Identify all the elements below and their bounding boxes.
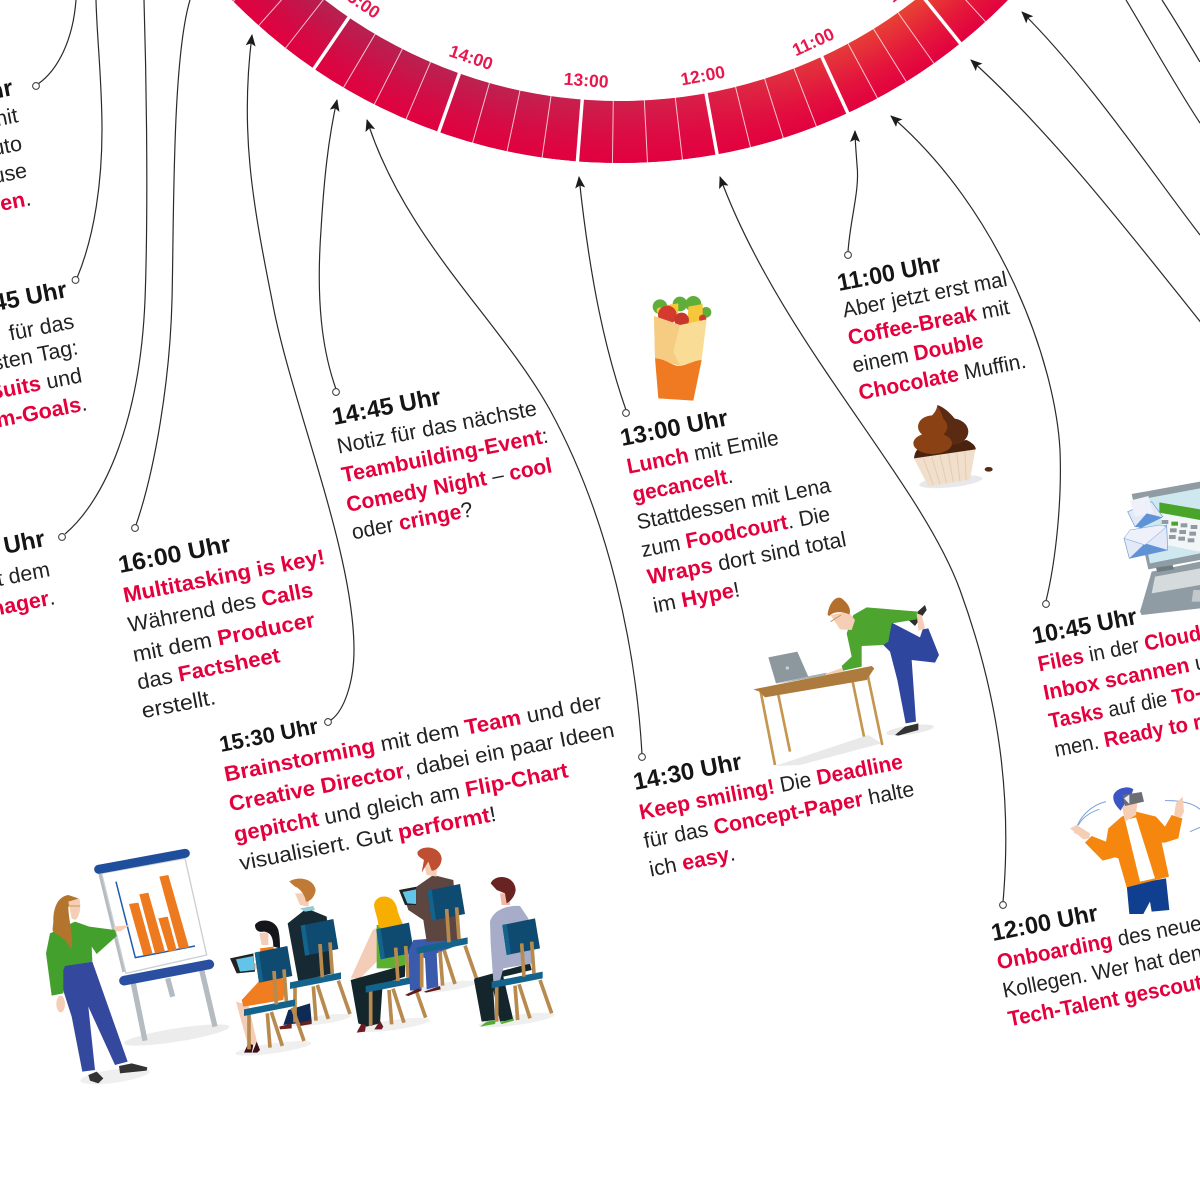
text block: cut-off left entry 1	[0, 74, 33, 226]
body text	[995, 911, 1200, 1031]
text block: cut-off left entry 2: für das	[7, 309, 76, 345]
body text: mit dem Producer	[131, 608, 317, 667]
person with tablet and beard	[399, 847, 477, 996]
body text: Comedy Night – cool	[344, 453, 554, 517]
body text	[623, 417, 854, 618]
body text: Lunch mit Emile	[625, 426, 781, 479]
illustration: laptop with calendar and mail	[1124, 482, 1200, 615]
body text: Creative Director, dabei ein paar Ideen	[227, 718, 616, 816]
body text: gepitcht und gleich am Flip-Chart	[232, 758, 570, 847]
illustration: wrap	[653, 296, 711, 401]
body text: zum Foodcourt. Die	[639, 502, 832, 562]
body text: Aber jetzt erst mal	[841, 267, 1009, 322]
body text: ich easy.	[647, 841, 737, 881]
body text: Chocolate Muffin.	[857, 349, 1028, 405]
text block: 16:00 Uhr	[111, 513, 349, 723]
text block: 12:00 Uhr onboarding: 12:00 Uhr	[989, 900, 1100, 947]
body text	[636, 749, 922, 881]
body text	[333, 395, 561, 544]
text block: 12:00 Uhr onboarding	[989, 881, 1200, 1031]
person in grey sweater	[474, 877, 552, 1027]
illustration: seated audience	[230, 847, 555, 1059]
body text	[840, 266, 1028, 405]
text block: 15:30 Uhr	[214, 658, 628, 875]
person with yellow hair	[351, 896, 426, 1033]
text block: 10:45 Uhr	[1030, 592, 1200, 762]
text block: cut-off left entry 3	[0, 525, 57, 627]
hour labels on the ring: 12:00	[679, 62, 727, 89]
text block: 11:00 Uhr	[834, 238, 1028, 405]
body text: erstellt.	[140, 685, 218, 723]
person in suit	[279, 879, 350, 1029]
hour labels on the ring	[336, 0, 931, 92]
body text: oder cringe?	[350, 497, 475, 544]
person with orange dress	[230, 920, 304, 1053]
text block: 14:30 Uhr	[630, 717, 922, 881]
body text: Coffee-Break mit	[846, 295, 1011, 350]
body text: das Factsheet	[135, 643, 282, 695]
illustration: woman stretching at desk	[753, 598, 939, 766]
text block: 13:00 Uhr	[617, 387, 854, 618]
arrows and connector lines	[33, 0, 1200, 908]
body text: im Hype!	[651, 577, 742, 618]
clock ring	[108, 0, 1132, 166]
body text	[117, 545, 349, 723]
body text: einem Double	[850, 329, 985, 378]
body text: Wraps dort sind total	[645, 527, 848, 589]
body text	[1036, 621, 1200, 762]
text block: 11:00 Uhr: 11:00 Uhr	[835, 250, 943, 297]
hour labels on the ring: 13:00	[563, 69, 610, 92]
illustration: cupcake	[913, 405, 993, 491]
text block: 14:45 Uhr	[327, 365, 561, 544]
body text	[220, 688, 628, 875]
text block: 13:00 Uhr: 13:00 Uhr	[618, 405, 730, 452]
text block: 16:00 Uhr: 16:00 Uhr	[116, 531, 233, 579]
text block: 15:30 Uhr: 15:30 Uhr	[217, 713, 321, 757]
text block: 14:45 Uhr: 14:45 Uhr	[330, 383, 443, 431]
illustration: presenter at flip chart	[46, 853, 230, 1087]
text block: 14:30 Uhr: 14:30 Uhr	[631, 748, 744, 796]
hour labels on the ring: 11:00	[789, 24, 837, 60]
illustration: man with VR headset	[1070, 787, 1200, 914]
hour labels on the ring: 14:00	[447, 41, 496, 74]
text block: 10:45 Uhr: 10:45 Uhr	[1030, 603, 1139, 650]
body text: Brainstorming mit dem Team und der	[222, 690, 604, 787]
body text: Teambuilding-Event:	[339, 424, 550, 487]
body text: Stattdessen mit Lena	[635, 473, 833, 534]
text block: cut-off left entry 2	[0, 276, 89, 439]
body text: Während des Calls	[126, 578, 315, 637]
body text: Notiz für das nächste	[335, 396, 539, 459]
body text: Multitasking is key!	[121, 545, 327, 608]
body text: visualisiert. Gut performt!	[237, 802, 498, 875]
body text: gecancelt.	[630, 464, 735, 507]
body text: für das Concept-Paper halte	[642, 777, 916, 853]
body text: Keep smiling! Die Deadline	[637, 750, 905, 824]
